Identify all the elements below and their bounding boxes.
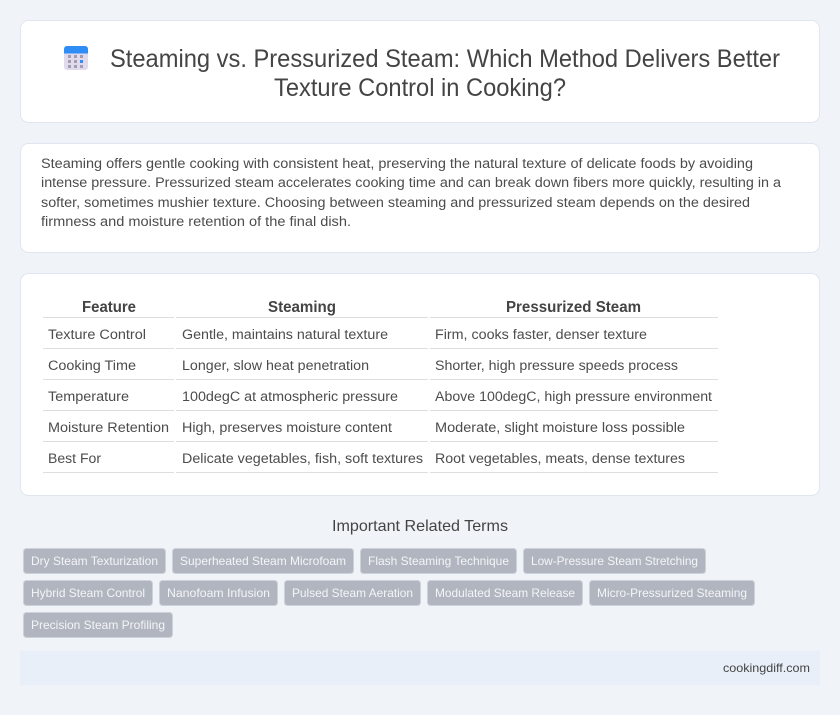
tag: precision steam profiling: Precision Steam Profiling	[31, 618, 165, 632]
table row: texture control: Firm, cooks faster, denser texture	[435, 327, 647, 343]
text block: summary: Steaming offers gentle cooking with consistent heat, preserving the natural texture of delicate foods by avoiding	[41, 156, 753, 172]
title: Steaming vs. Pressurized Steam: Which Method Delivers Better	[110, 45, 780, 73]
table header	[43, 299, 718, 318]
table row: temperature: 100degC at atmospheric pressure	[182, 389, 398, 405]
icon: calendar	[64, 46, 88, 70]
table header: Feature	[82, 299, 136, 316]
footer	[20, 651, 820, 685]
tag: hybrid steam control: Hybrid Steam Control	[31, 586, 145, 600]
table row: moisture retention	[43, 420, 718, 442]
tag: modulated steam release: Modulated Steam Release	[435, 586, 575, 600]
tag: dry steam texturization: Dry Steam Texturization	[31, 554, 158, 568]
panel: related terms	[24, 518, 754, 638]
tag: nanofoam infusion: Nanofoam Infusion	[167, 586, 270, 600]
tag: precision steam profiling	[24, 612, 172, 638]
table row: temperature	[43, 389, 718, 410]
table row: cooking time: Cooking Time	[48, 358, 136, 374]
table row: moisture retention: High, preserves moisture content	[182, 420, 392, 436]
table row: temperature: Above 100degC, high pressure environment	[435, 389, 712, 405]
table row: cooking time: Shorter, high pressure speeds process	[435, 358, 678, 374]
tag: dry steam texturization	[24, 548, 166, 574]
heading: important related terms: Important Related Terms	[332, 518, 508, 535]
table row: temperature: Temperature	[48, 389, 129, 405]
tag: low-pressure steam stretching	[524, 548, 706, 574]
table row: cooking time	[43, 358, 718, 380]
panel: title header	[20, 20, 820, 122]
tag: micro-pressurized steaming	[590, 580, 754, 606]
text block: summary: intense pressure. Pressurized steam accelerates cooking time and can break down fibers more quickly, resulting in a	[41, 175, 781, 191]
table row: cooking time: Longer, slow heat penetration	[182, 358, 369, 374]
text block: summary: softer, sometimes mushier texture. Choosing between steaming and pressurized steam depends on the desired	[41, 195, 750, 211]
table row: texture control: Texture Control	[48, 327, 146, 343]
panel: summary paragraph	[20, 144, 820, 252]
title	[110, 45, 780, 102]
tag: hybrid steam control	[24, 580, 152, 606]
text block: summary	[41, 156, 781, 230]
table row: best for: Delicate vegetables, fish, soft textures	[182, 451, 423, 467]
text block: summary: firmness and moisture retention of the final dish.	[41, 214, 351, 230]
tag: nanofoam infusion	[160, 580, 278, 606]
tag: flash steaming technique: Flash Steaming Technique	[368, 554, 509, 568]
table row: moisture retention: Moderate, slight moisture loss possible	[435, 420, 685, 436]
tag: flash steaming technique	[360, 548, 516, 574]
tag: superheated steam microfoam: Superheated Steam Microfoam	[180, 554, 346, 568]
table row: best for: Root vegetables, meats, dense textures	[435, 451, 685, 467]
tag: micro-pressurized steaming: Micro-Pressurized Steaming	[597, 586, 747, 600]
table row: texture control	[43, 327, 718, 348]
footer: cookingdiff.com	[723, 661, 810, 675]
table row: best for: Best For	[48, 451, 101, 467]
table row: moisture retention: Moisture Retention	[48, 420, 169, 436]
table header: Pressurized Steam	[506, 299, 641, 316]
table header: Steaming	[268, 299, 336, 316]
table row: best for	[43, 451, 718, 472]
table row: texture control: Gentle, maintains natural texture	[182, 327, 388, 343]
tag: pulsed steam aeration	[284, 580, 420, 606]
tag: pulsed steam aeration: Pulsed Steam Aeration	[292, 586, 413, 600]
panel: comparison table	[20, 274, 820, 496]
title: Texture Control in Cooking?	[274, 74, 566, 102]
tag: superheated steam microfoam	[172, 548, 354, 574]
tag: modulated steam release	[428, 580, 582, 606]
tag: low-pressure steam stretching: Low-Pressure Steam Stretching	[531, 554, 698, 568]
